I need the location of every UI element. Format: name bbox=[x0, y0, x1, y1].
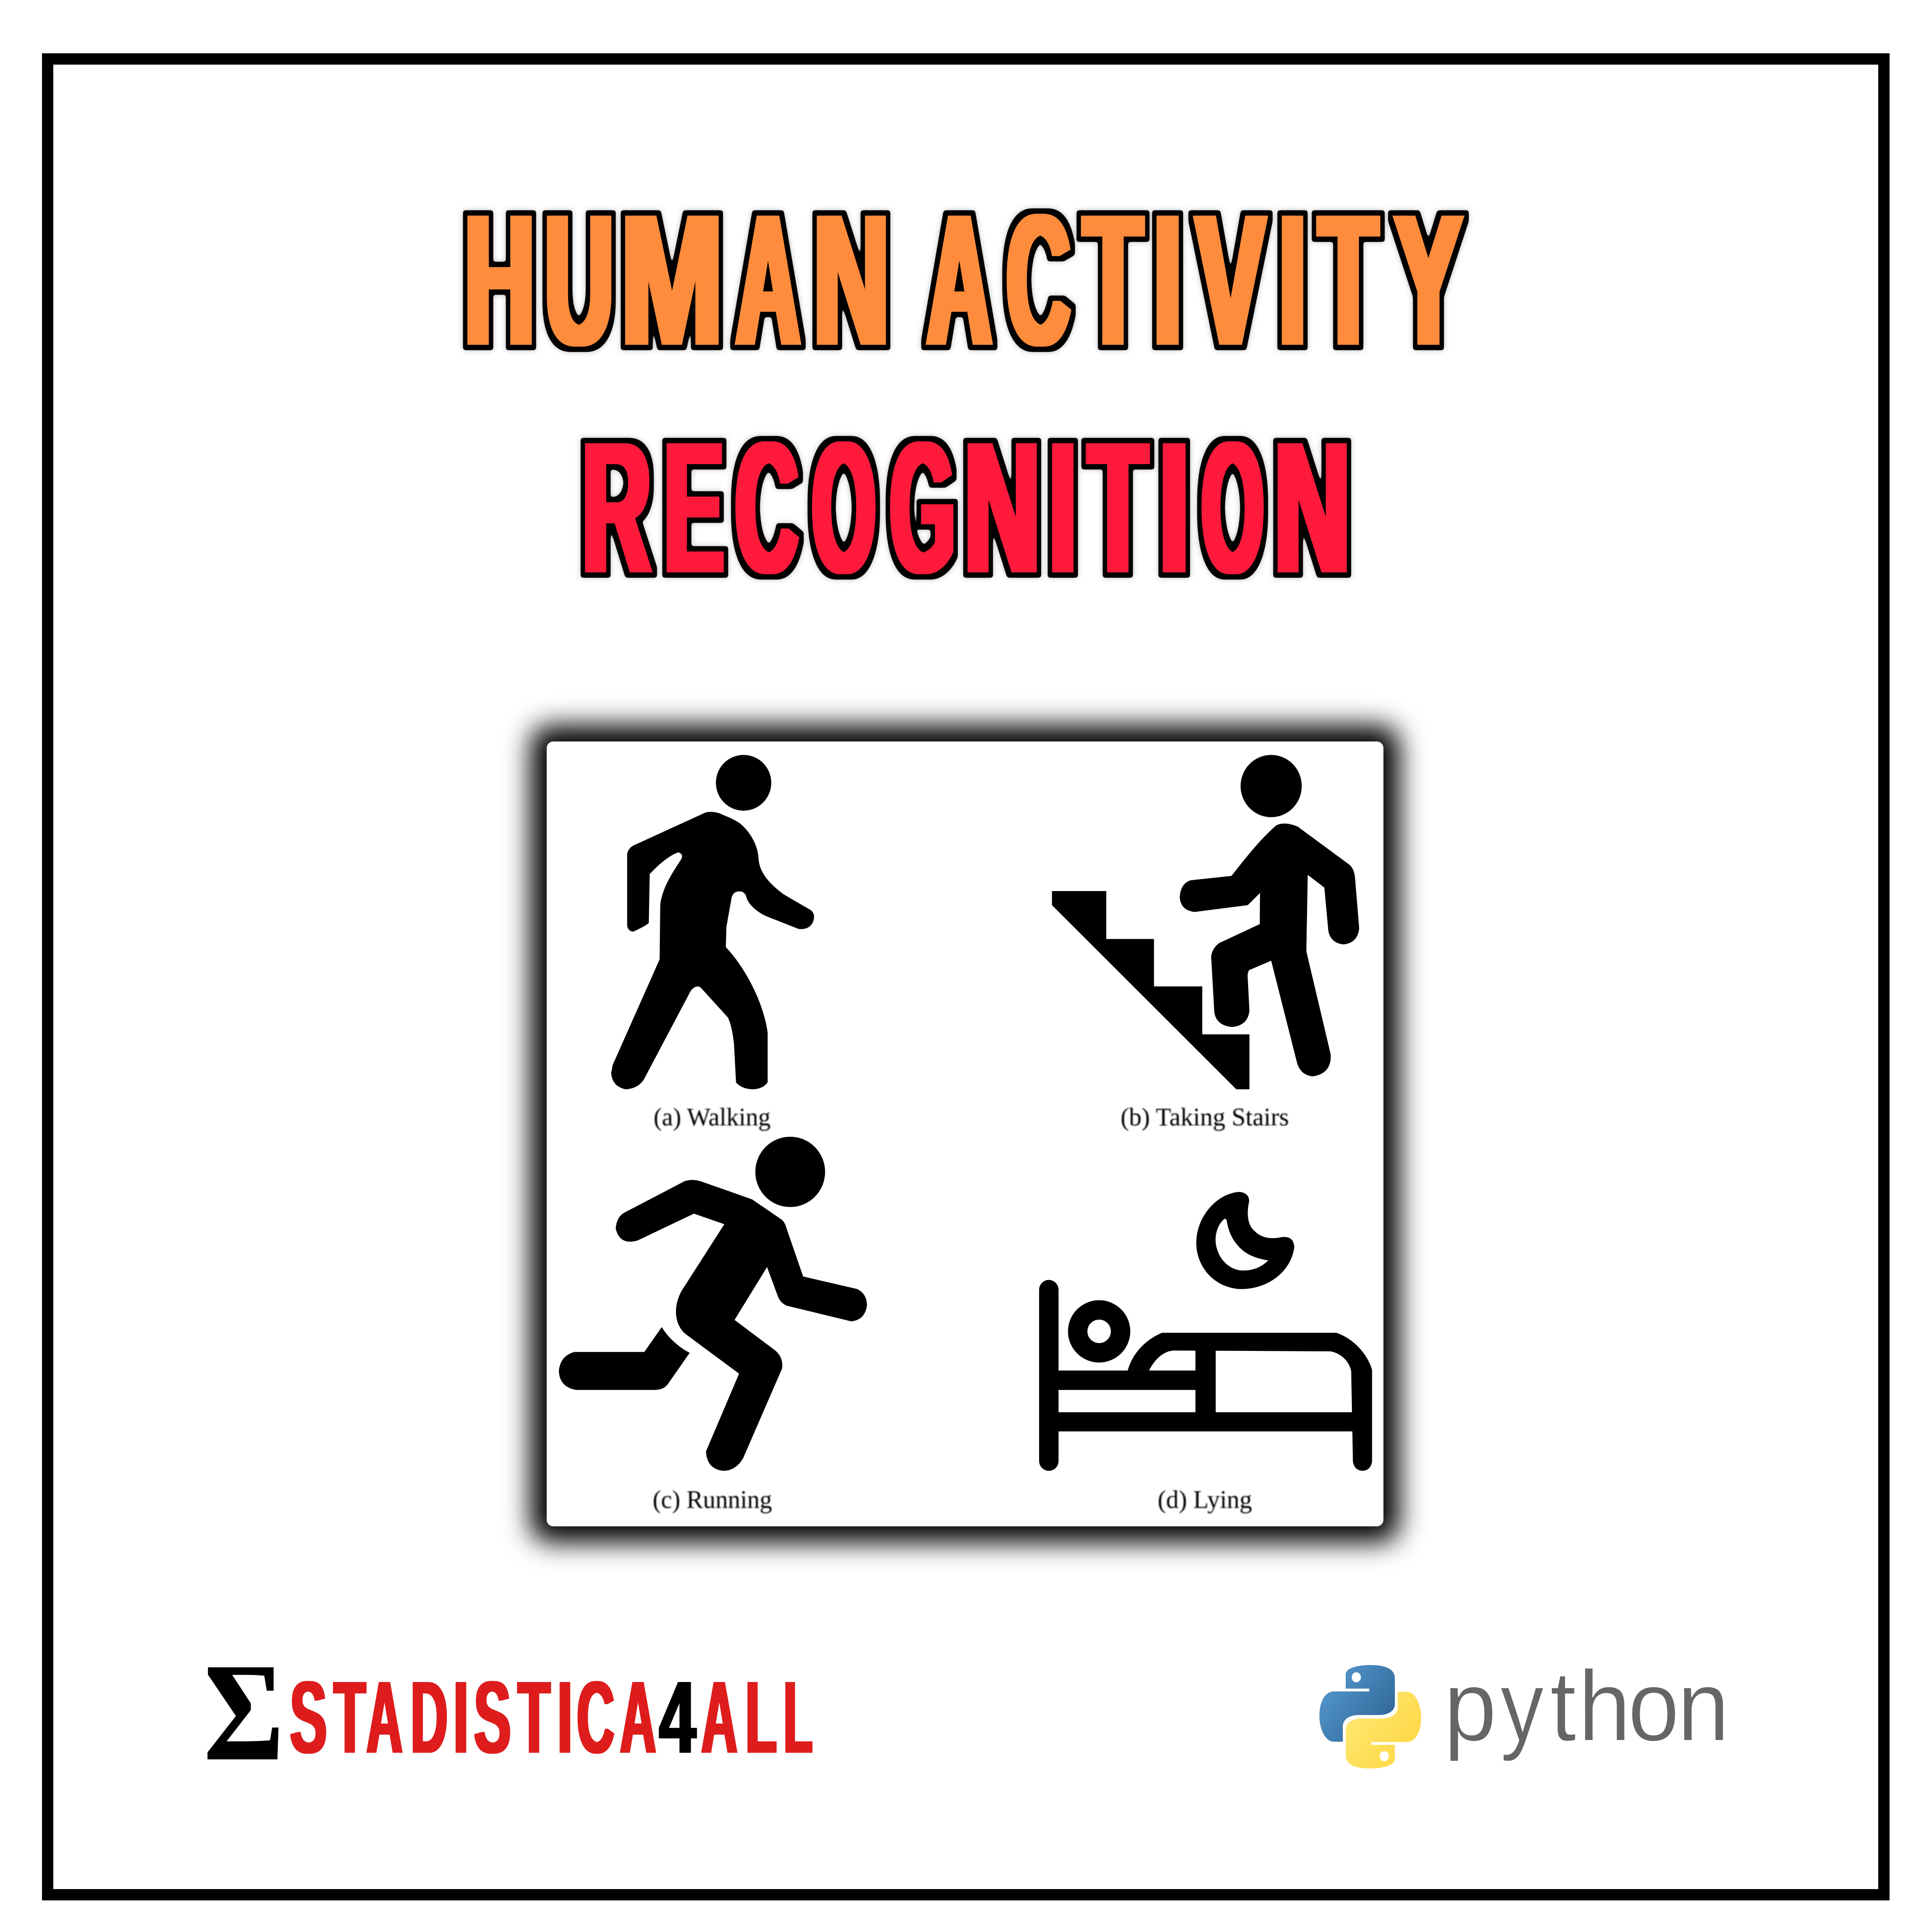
caption: running: (c) Running bbox=[653, 1485, 772, 1514]
title line 1: Human Activity: N bbox=[814, 175, 889, 385]
title line 1: Human Activity: I bbox=[1279, 175, 1306, 385]
title line 2: Recognition: E bbox=[665, 403, 724, 612]
icon: lying in bed with moon bbox=[1039, 1192, 1372, 1471]
icon: running figure bbox=[559, 1137, 867, 1471]
logo wordmark: S bbox=[474, 1660, 511, 1775]
title line 2: Recognition: O bbox=[1202, 403, 1263, 612]
title line 2: Recognition: C bbox=[736, 403, 798, 612]
title bbox=[465, 175, 1462, 612]
logo: python bbox=[1319, 1650, 1730, 1768]
caption: lying: (d) Lying bbox=[1158, 1485, 1252, 1514]
title line 2: Recognition: I bbox=[1159, 403, 1189, 612]
logo: Estadistica4all bbox=[204, 1634, 812, 1790]
title line 2: Recognition: T bbox=[1089, 403, 1147, 612]
logo wordmark: T bbox=[518, 1660, 550, 1775]
title line 1: Human Activity: H bbox=[465, 175, 534, 385]
logo wordmark: L bbox=[745, 1660, 777, 1775]
icon: taking stairs figure bbox=[1052, 755, 1359, 1089]
logo wordmark: I bbox=[558, 1660, 573, 1775]
title line 2: Recognition: O bbox=[812, 403, 875, 612]
logo wordmark: A bbox=[701, 1660, 737, 1775]
caption: taking stairs: (b) Taking Stairs bbox=[1121, 1103, 1289, 1131]
caption: walking: (a) Walking bbox=[654, 1103, 771, 1131]
logo wordmark: I bbox=[453, 1660, 468, 1775]
icon: python snakes bbox=[1319, 1665, 1421, 1768]
panel: activity icons bbox=[547, 741, 1383, 1526]
logo wordmark: A bbox=[620, 1660, 656, 1775]
python wordmark: t bbox=[1550, 1650, 1576, 1762]
title line 2: Recognition: G bbox=[891, 403, 955, 612]
logo wordmark: D bbox=[411, 1660, 448, 1775]
title line 1: Human Activity: Y bbox=[1394, 175, 1462, 385]
logo sigma mark: Σ bbox=[204, 1634, 283, 1790]
icon: walking figure bbox=[611, 755, 814, 1089]
python wordmark: o bbox=[1628, 1650, 1679, 1762]
title line 2: Recognition: N bbox=[1274, 403, 1350, 612]
python wordmark: p bbox=[1444, 1650, 1497, 1762]
python wordmark: y bbox=[1500, 1650, 1544, 1762]
title line 1: Human Activity: C bbox=[1007, 175, 1070, 385]
python wordmark: h bbox=[1578, 1650, 1631, 1762]
title line 1: Human Activity: T bbox=[1319, 175, 1378, 385]
title line 2: Recognition: R bbox=[583, 403, 651, 612]
title line 1: Human Activity: U bbox=[545, 175, 613, 385]
python wordmark: n bbox=[1677, 1650, 1730, 1762]
title line 1: Human Activity: I bbox=[1154, 175, 1182, 385]
title line 1: Human Activity: A bbox=[736, 175, 800, 385]
title line 2: Recognition: N bbox=[965, 403, 1040, 612]
title line 1: Human Activity: A bbox=[927, 175, 991, 385]
logo wordmark: A bbox=[366, 1660, 402, 1775]
title line 1: Human Activity: V bbox=[1196, 175, 1266, 385]
title line 2: Recognition: I bbox=[1049, 403, 1076, 612]
logo wordmark: T bbox=[334, 1660, 366, 1775]
title line 1: Human Activity: M bbox=[621, 175, 723, 385]
text: L bbox=[783, 1660, 812, 1775]
logo wordmark: C bbox=[577, 1660, 615, 1775]
title line 1: Human Activity: T bbox=[1083, 175, 1142, 385]
logo wordmark: S bbox=[290, 1660, 327, 1775]
logo wordmark: 4 bbox=[659, 1660, 696, 1775]
